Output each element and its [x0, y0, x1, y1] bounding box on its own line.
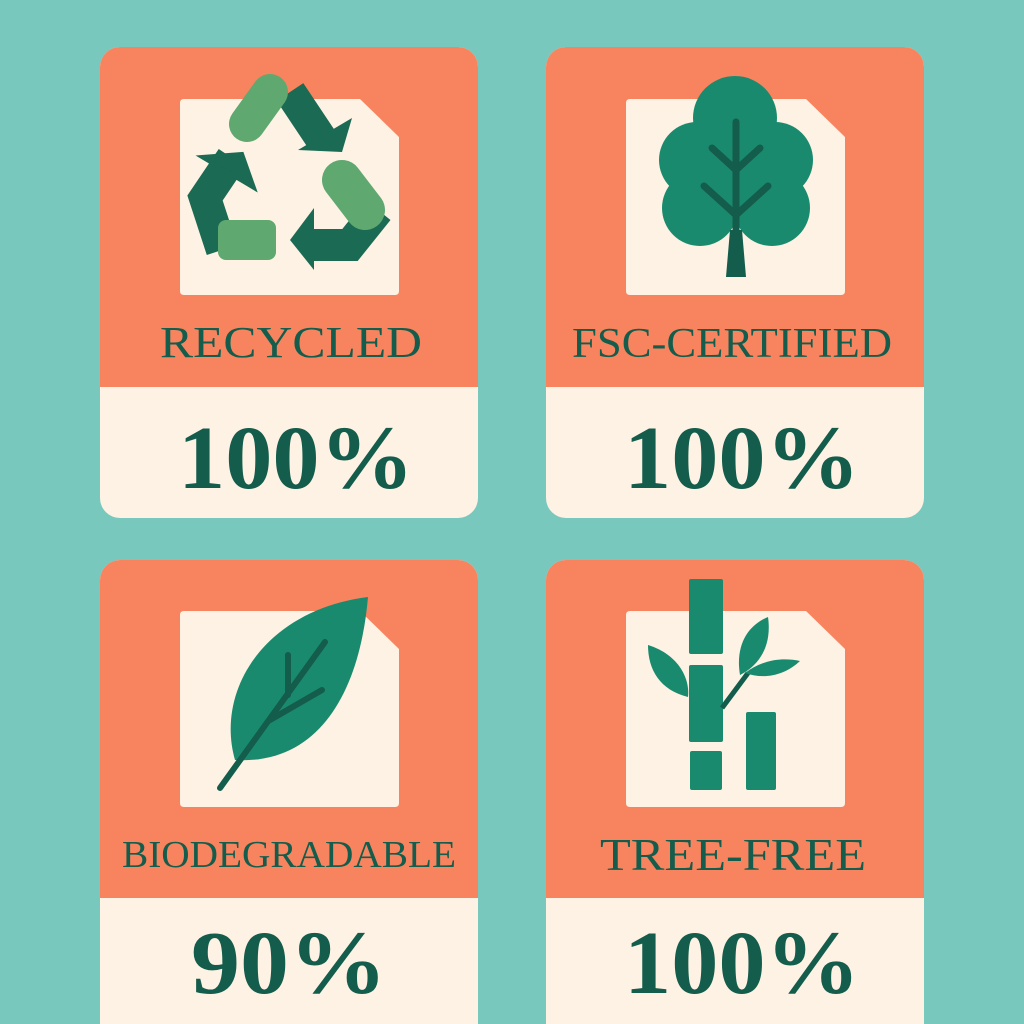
panel: tree-free: [546, 560, 924, 1024]
icon: leaf: [220, 597, 368, 788]
label: fsc-certified: FSC-CERTIFIED: [572, 321, 892, 367]
label: biodegradable: BIODEGRADABLE: [122, 834, 456, 876]
value: 100%: 100%: [624, 914, 860, 1013]
value: 90%: 90%: [191, 914, 387, 1013]
panel: fsc-certified: [546, 47, 924, 518]
panel: recycled: [100, 47, 478, 518]
value: 100%: 100%: [178, 409, 414, 508]
icon: recycle: [202, 92, 378, 270]
value: 100%: 100%: [624, 409, 860, 508]
label: tree-free: TREE-FREE: [600, 829, 866, 880]
panel: biodegradable: [100, 560, 478, 1024]
label: recycled: RECYCLED: [160, 318, 422, 367]
icon: tree: [659, 76, 813, 277]
icon: bamboo: [648, 579, 800, 790]
